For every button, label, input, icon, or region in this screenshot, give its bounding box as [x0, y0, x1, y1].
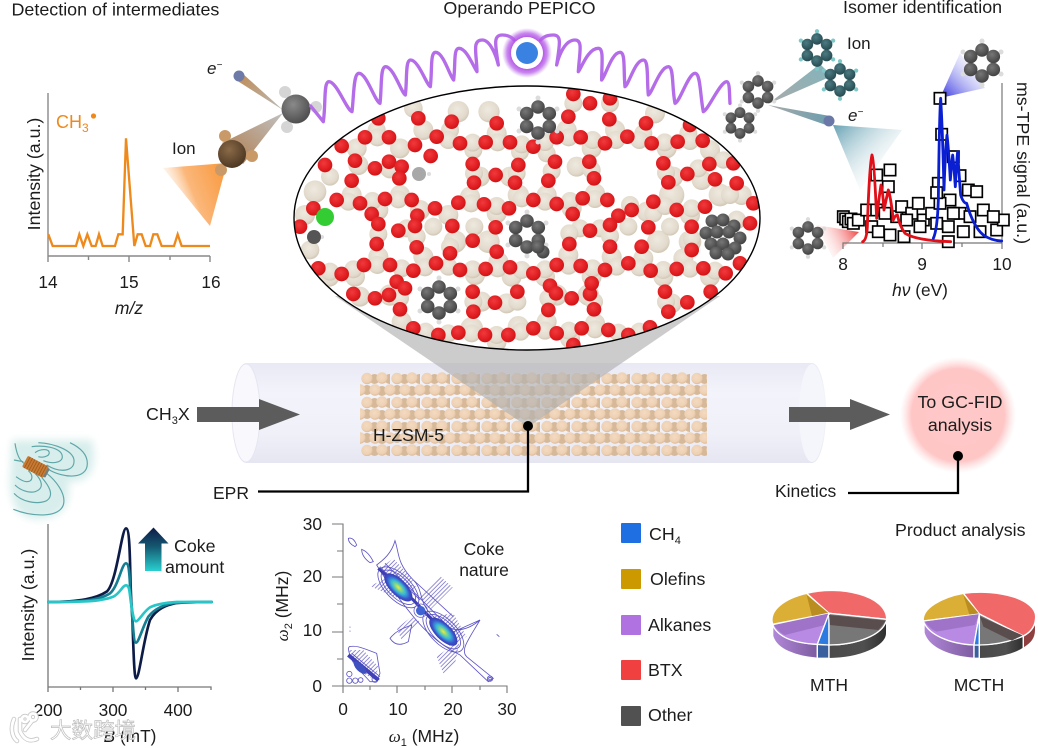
legend other	[621, 705, 693, 726]
y tick labels: 30	[303, 514, 322, 534]
x axis label: (MHz)	[407, 726, 459, 746]
panel: HYSCORE contour plot	[272, 514, 517, 748]
inlet arrow	[197, 399, 300, 430]
x tick labels: 0	[338, 699, 348, 719]
x axis label: hν (eV)	[892, 280, 948, 300]
electron	[234, 70, 244, 82]
kinetics connector	[775, 451, 963, 501]
panel: EPR spectrum	[18, 524, 224, 746]
fulvene-type isomer	[790, 217, 826, 259]
EPR connector: EPR	[213, 483, 249, 503]
orange beam to spectrum	[163, 163, 227, 226]
electron label: −	[216, 60, 222, 71]
molecule in pore centre	[506, 210, 550, 258]
CH3X label: X	[178, 404, 190, 424]
ion label: Ion	[847, 34, 871, 53]
GC-FID circle: To GC-FID	[918, 392, 1002, 412]
watermark: 大数跨境	[50, 719, 136, 743]
legend alkanes: Alkanes	[648, 615, 711, 635]
watermark	[12, 714, 136, 743]
x tick labels: 10	[388, 699, 408, 719]
x tick labels: 400	[164, 700, 192, 720]
kinetics connector: Kinetics	[775, 481, 837, 501]
legend BTX: BTX	[648, 660, 683, 680]
CH3X label: 3	[172, 415, 178, 427]
tube reactor	[232, 363, 826, 463]
x axis label: m/z	[115, 298, 143, 318]
red isomer fit	[863, 155, 951, 242]
molecule in pore top	[516, 96, 560, 144]
y axis label: ms-TPE signal (a.u.)	[1013, 82, 1033, 244]
silicon atoms	[295, 94, 752, 352]
x tick labels: 14	[38, 272, 58, 292]
spectrum axes	[48, 93, 210, 262]
H-ZSM-5 label: H-ZSM-5	[373, 425, 444, 445]
methyl radical	[412, 167, 431, 181]
y tick labels: 20	[303, 566, 322, 586]
CH3 ion	[215, 130, 258, 176]
y tick labels: 10	[303, 620, 322, 640]
electron	[824, 116, 834, 126]
ion beam	[222, 113, 283, 164]
coke nature label: Coke	[464, 539, 504, 559]
EPR connector	[213, 421, 533, 503]
x tick labels: 20	[443, 699, 463, 719]
ion molecules	[799, 29, 858, 101]
electron label: e	[207, 59, 216, 78]
x axis label: ω	[389, 727, 401, 746]
legend CH4	[621, 523, 681, 547]
top faces	[963, 592, 1036, 636]
contours	[347, 538, 499, 683]
legend CH4: 4	[675, 535, 681, 547]
legend olefins: Olefins	[650, 569, 705, 589]
y axis label: ω	[273, 629, 292, 641]
coke amount label	[165, 536, 224, 577]
signal peaks	[380, 569, 417, 606]
coke amount label: Coke	[174, 536, 216, 556]
side faces	[773, 619, 887, 659]
ridges	[378, 568, 453, 642]
panel: mass spectrum CH3	[24, 93, 221, 318]
x tick labels: 10	[992, 254, 1012, 274]
electron label: e	[848, 106, 857, 125]
pie: MTH	[772, 590, 887, 659]
y axis label: 2	[283, 623, 295, 629]
pie: MCTH	[923, 592, 1036, 659]
GC-FID circle: analysis	[928, 415, 992, 435]
halogen atom	[316, 208, 334, 226]
ion label: Ion	[172, 139, 196, 158]
x tick labels: 16	[201, 272, 221, 292]
photon source	[502, 28, 552, 78]
coke nature label	[459, 539, 509, 580]
y axis label: Intensity (a.u.)	[18, 549, 38, 661]
axes	[48, 524, 211, 692]
gradient arrow	[138, 528, 168, 571]
spectrum line	[48, 138, 210, 246]
data squares	[838, 93, 1009, 247]
y tick labels	[303, 514, 322, 696]
title: detection of intermediates: Detection of intermediates	[12, 0, 219, 20]
coke amount label: amount	[165, 557, 224, 577]
cone from reactor to zeolite view	[335, 296, 720, 427]
y axis label: Intensity (a.u.)	[24, 118, 44, 230]
legend	[621, 523, 711, 726]
x tick labels: 30	[497, 699, 517, 719]
photon wave	[311, 35, 730, 122]
label MCTH: MCTH	[954, 675, 1004, 695]
x tick labels	[38, 272, 221, 292]
electron label: −	[857, 107, 863, 118]
CH3X label: CH	[146, 404, 172, 424]
x tick labels: 200	[34, 700, 62, 720]
beams to electron and ion	[768, 53, 985, 258]
x tick labels: 9	[917, 254, 927, 274]
CH3 label: CH	[56, 112, 82, 132]
CH3 label: 3	[82, 121, 89, 135]
x axis label: B (mT)	[104, 726, 156, 746]
icon: EPR magnet coil	[10, 440, 94, 519]
label MTH: MTH	[810, 675, 848, 695]
y axis label: (MHz)	[272, 571, 292, 623]
oxygen atoms	[293, 87, 761, 352]
legend CH4: CH	[649, 524, 675, 544]
panel: zeolite pore structure	[293, 86, 761, 352]
axes	[332, 524, 507, 693]
zeolite particles	[360, 372, 707, 456]
CH3 label	[56, 112, 96, 135]
top faces	[807, 590, 887, 619]
molecules near spring	[723, 71, 776, 143]
outlet arrow	[789, 399, 890, 430]
zeolite view outline	[294, 86, 760, 350]
coke amount traces	[48, 528, 212, 678]
legend BTX	[621, 660, 683, 680]
icon: CH3 ionisation with ion and electron	[163, 59, 322, 226]
heading: product analysis: Product analysis	[895, 520, 1026, 540]
side faces	[924, 622, 1036, 659]
panel: isomer spectrum	[723, 29, 1033, 300]
molecule in pore bottom	[418, 276, 460, 324]
neutral CH3	[279, 86, 322, 133]
coke cluster	[700, 214, 746, 260]
x tick labels: 300	[99, 700, 127, 720]
x tick labels: 15	[119, 272, 139, 292]
legend other: Other	[648, 705, 693, 725]
x tick labels	[338, 699, 517, 719]
coke nature label: nature	[459, 560, 509, 580]
x tick labels: 8	[838, 254, 848, 274]
x tick labels	[838, 254, 1012, 274]
electron beam	[236, 74, 283, 110]
y tick labels: 0	[312, 676, 322, 696]
x tick labels	[34, 700, 192, 720]
blue isomer fit	[933, 98, 1002, 241]
spectrum axes	[843, 83, 1002, 249]
benzene-type isomer	[960, 38, 1004, 88]
GC-FID circle	[900, 357, 1016, 473]
legend olefins	[621, 569, 705, 589]
methyl fragment	[307, 230, 324, 244]
